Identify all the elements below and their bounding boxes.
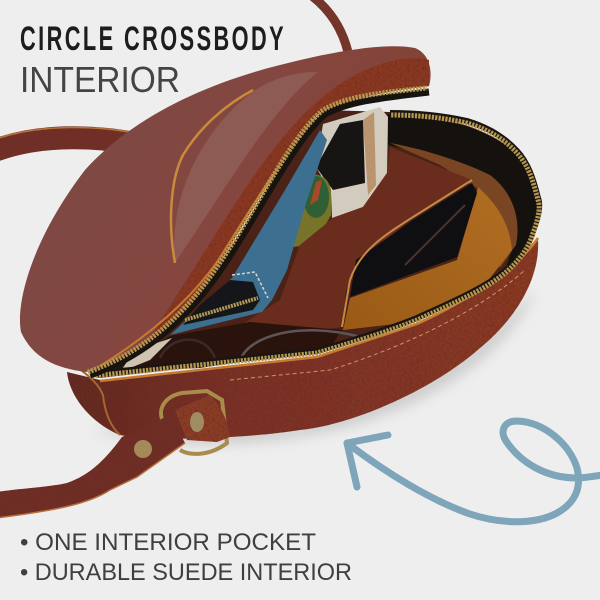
black lining — [388, 114, 538, 272]
title: INTERIOR — [20, 59, 180, 100]
strap edge stitch — [0, 443, 185, 518]
bag interior — [90, 107, 538, 378]
arrow — [347, 421, 600, 522]
scarf — [316, 107, 388, 218]
bullet list — [20, 529, 352, 586]
flap — [20, 46, 431, 375]
title: CIRCLE CROSSBODY — [20, 20, 284, 58]
blue notebook — [170, 130, 327, 335]
scarf tan stripe — [363, 112, 376, 195]
bullet list: • ONE INTERIOR POCKET — [20, 529, 316, 556]
upper zipper — [88, 88, 429, 375]
front body panel — [67, 240, 538, 439]
flap edge stitch — [171, 90, 253, 263]
tan suede — [343, 187, 512, 330]
lower zipper — [92, 113, 539, 376]
rivet lower — [134, 440, 152, 458]
interior base — [90, 110, 538, 378]
buckle and lower strap — [0, 391, 230, 518]
flap orange edge near zipper — [100, 103, 340, 366]
napkin scrap — [120, 338, 172, 372]
notebook stitches — [232, 272, 268, 298]
phone glare — [405, 205, 465, 265]
strap: top right — [312, 0, 348, 52]
pocket edge — [342, 180, 472, 327]
body corner seam — [52, 347, 120, 435]
body stitching — [230, 270, 525, 380]
strap: left — [0, 127, 155, 150]
bag shadow — [90, 290, 535, 445]
ruffled suede edge — [390, 143, 518, 268]
title — [20, 20, 284, 100]
body orange edge — [100, 238, 538, 381]
flap light highlight — [174, 72, 318, 263]
glasses — [160, 330, 357, 360]
brown interior pocket — [208, 147, 472, 346]
phone — [350, 183, 477, 297]
notebook zipper — [185, 298, 258, 320]
lower strap — [0, 415, 185, 518]
bullet list: • DURABLE SUEDE INTERIOR — [20, 559, 352, 586]
rivet upper — [190, 412, 204, 432]
scarf dark check — [316, 120, 365, 190]
dark lower interior — [110, 322, 342, 372]
rust textured strip — [150, 58, 429, 340]
second tab — [175, 395, 230, 442]
notebook black inner — [183, 280, 260, 325]
D ring — [161, 391, 227, 454]
green tin — [290, 175, 331, 247]
